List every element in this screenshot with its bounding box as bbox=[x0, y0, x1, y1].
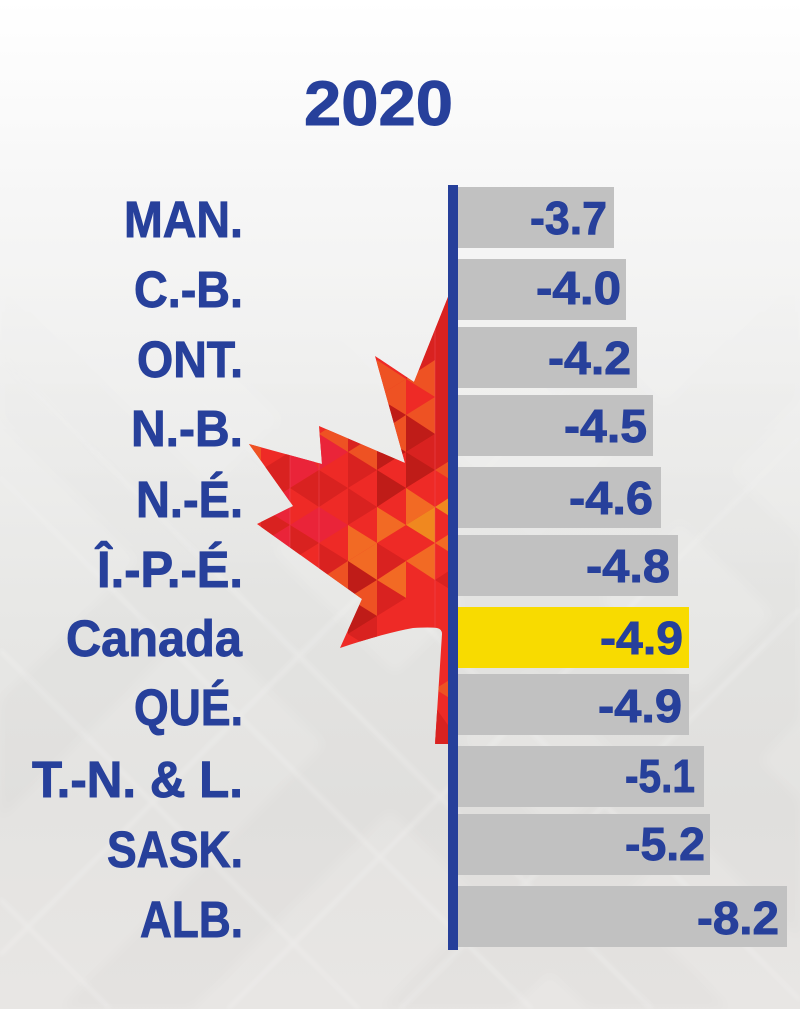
bar: SASK.: -5.2 bbox=[625, 818, 705, 870]
bar: T.-N. & L. bbox=[458, 746, 704, 807]
bar: MAN.: -3.7 bbox=[530, 192, 607, 244]
bar: C.-B. bbox=[458, 259, 626, 320]
row labels: QUÉ. bbox=[134, 679, 243, 736]
row labels: ALB. bbox=[140, 891, 243, 948]
row labels bbox=[32, 191, 243, 948]
row labels: C.-B. bbox=[134, 261, 243, 318]
axis line bbox=[448, 185, 458, 950]
maple leaf bbox=[249, 297, 448, 744]
bar: ALB. bbox=[458, 886, 787, 947]
bar: Canada (highlighted) bbox=[458, 607, 689, 668]
row labels: T.-N. & L. bbox=[32, 751, 243, 808]
bar: N.-É.: -4.6 bbox=[569, 472, 653, 524]
bar: ONT. bbox=[458, 327, 637, 388]
bar: QUÉ.: -4.9 bbox=[598, 680, 682, 732]
bar: N.-B. bbox=[458, 395, 653, 456]
bar: SASK. bbox=[458, 814, 710, 875]
bar: MAN. bbox=[458, 187, 614, 248]
bar: C.-B.: -4.0 bbox=[536, 262, 621, 314]
row labels: N.-É. bbox=[136, 471, 243, 528]
bar: QUÉ. bbox=[458, 674, 689, 735]
row labels: MAN. bbox=[124, 191, 243, 248]
row labels: Î.-P.-É. bbox=[94, 540, 243, 598]
bar: Canada (highlighted): -4.9 bbox=[600, 612, 683, 664]
bar: Î.-P.-É. bbox=[458, 535, 678, 596]
row labels: N.-B. bbox=[131, 400, 243, 457]
row labels: SASK. bbox=[107, 821, 243, 878]
bar: ONT.: -4.2 bbox=[548, 332, 631, 384]
bar: N.-É. bbox=[458, 467, 661, 528]
row labels: Canada bbox=[66, 610, 243, 667]
bar: ALB.: -8.2 bbox=[697, 892, 779, 944]
bar: Î.-P.-É.: -4.8 bbox=[586, 540, 670, 592]
title: 2020 bbox=[304, 69, 453, 139]
bar: T.-N. & L.: -5.1 bbox=[625, 750, 695, 802]
row labels: ONT. bbox=[137, 331, 243, 388]
bar: N.-B.: -4.5 bbox=[564, 400, 647, 452]
